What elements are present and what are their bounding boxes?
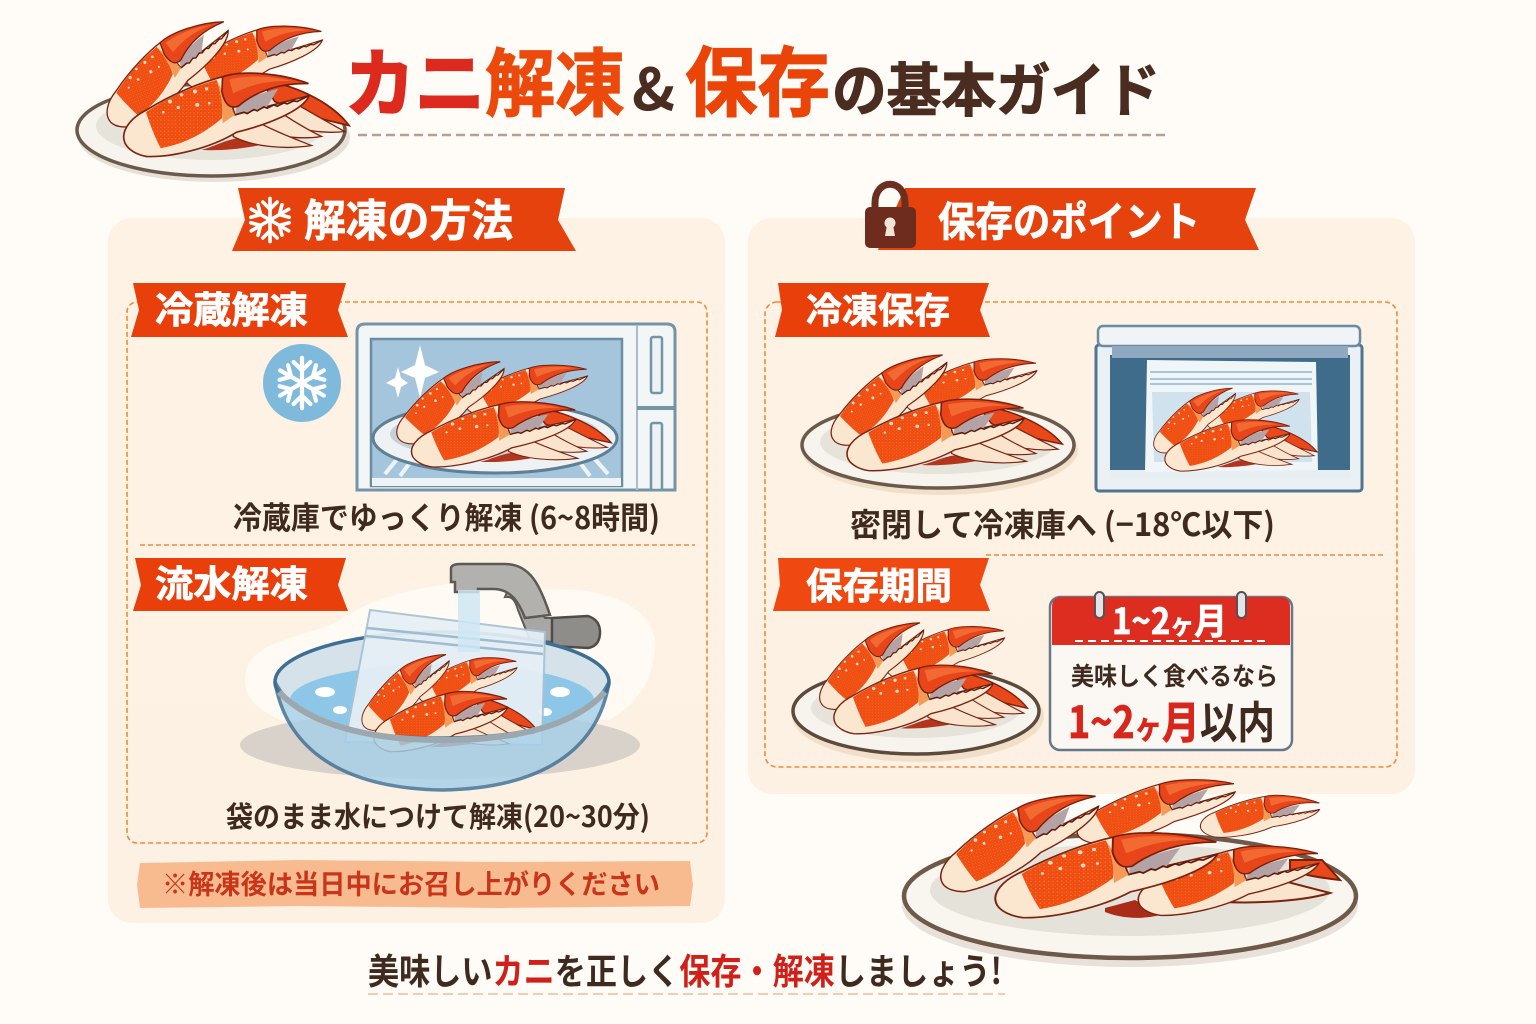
illustration: claws on plate	[802, 348, 1078, 495]
illustration: crab claws on plate, top left	[77, 14, 350, 182]
callout: eat same day: ※解凍後は当日中にお召し上がりください	[162, 863, 660, 902]
illustration: microwave with claws	[357, 324, 675, 490]
panel: thawing methods	[108, 185, 725, 923]
sub ribbon: freezer storage	[775, 282, 990, 337]
sub ribbon: running water thaw	[133, 554, 348, 611]
sub ribbon: fridge thaw	[131, 280, 348, 337]
heading ribbon: storage points: 保存のポイント	[938, 188, 1200, 248]
sub ribbon: freezer storage: 冷凍保存	[806, 282, 950, 334]
icon: snowflake badge	[263, 344, 341, 422]
title: 保存	[685, 22, 830, 132]
sub ribbon: storage period	[773, 556, 990, 611]
heading ribbon: thawing methods: 解凍の方法	[304, 185, 513, 249]
illustration: claws on plate, storage period	[792, 616, 1044, 762]
sub ribbon: fridge thaw: 冷蔵解凍	[155, 280, 308, 334]
title	[345, 22, 1160, 132]
footer message: 美味しいカニを正しく保存・解凍しましょう!	[368, 943, 1002, 995]
panel: storage points	[748, 184, 1415, 794]
heading ribbon: thawing methods	[232, 185, 576, 251]
illustration: bag in bowl under faucet	[240, 564, 655, 790]
calendar: 1-2 months: 1~2ヶ月以内	[1068, 687, 1275, 751]
sub ribbon: running water thaw: 流水解凍	[155, 554, 308, 608]
calendar: 1-2 months: 1~2ヶ月	[1112, 593, 1227, 645]
title: の基本ガイド	[832, 44, 1160, 128]
text: fridge thaw description: 冷蔵庫でゆっくり解凍 (6~8時間)	[233, 493, 660, 538]
illustration: freezer with bagged claws	[1096, 326, 1362, 491]
sub ribbon: storage period: 保存期間	[806, 556, 952, 610]
calendar: 1-2 months	[1050, 592, 1292, 751]
title: &	[632, 43, 675, 127]
text: running water description: 袋のまま水につけて解凍(20~30分)	[226, 794, 650, 836]
illustration: large plate of crab claws	[902, 777, 1358, 967]
text: freezer description: 密閉して冷凍庫へ (−18℃以下)	[850, 500, 1275, 546]
title: カニ解凍	[345, 25, 625, 132]
calendar: 1-2 months: 美味しく食べるなら	[1071, 657, 1278, 693]
icon: padlock	[865, 184, 916, 248]
